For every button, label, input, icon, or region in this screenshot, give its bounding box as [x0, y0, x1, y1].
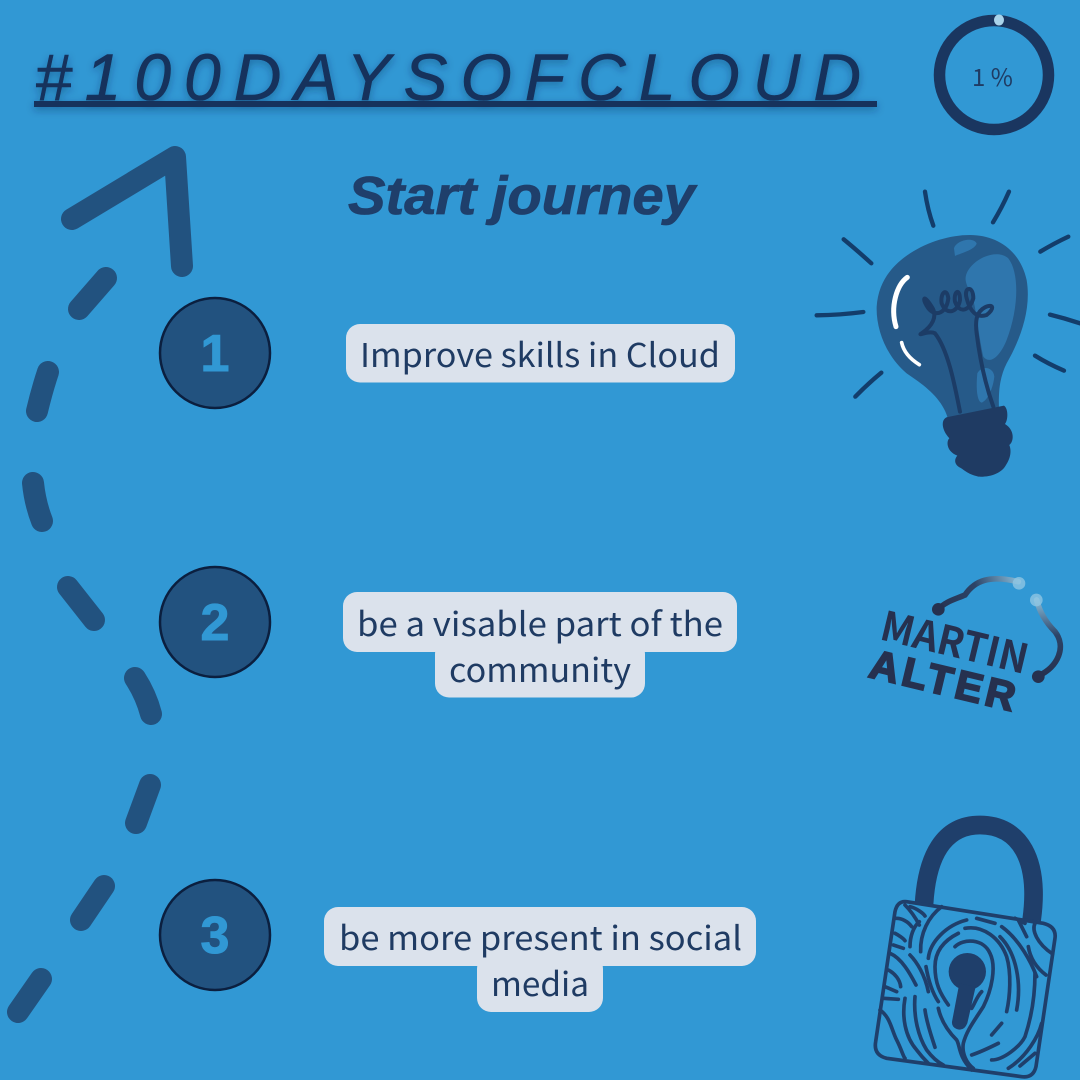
step 3 badge — [160, 880, 270, 990]
step 1 label: Improve skills in Cloud — [360, 329, 720, 377]
step 1 badge — [160, 298, 270, 408]
title: #100DAYSOFCLOUD — [35, 40, 861, 114]
step 1 badge: 1 — [201, 325, 229, 383]
logo: Martin Alter cloud: MARTIN — [876, 593, 1035, 686]
icon: fingerprint padlock — [875, 825, 1055, 1077]
step 2 badge: 2 — [201, 594, 229, 652]
progress ring 1%: 1 % — [972, 58, 1013, 93]
step 3 label: media — [491, 958, 589, 1006]
icon: light bulb — [817, 192, 1080, 477]
heading: start journey: Start journey — [348, 166, 698, 226]
step 2 label: community — [449, 644, 631, 692]
logo: Martin Alter cloud — [865, 577, 1060, 720]
dashed journey arrow — [18, 157, 182, 1012]
progress ring 1% — [940, 14, 1048, 130]
logo: Martin Alter cloud: ALTER — [865, 641, 1020, 720]
step 2 label: be a visable part of the — [357, 598, 723, 646]
step 2 badge — [160, 567, 270, 677]
step 3 badge: 3 — [201, 907, 229, 965]
step 3 label: be more present in social — [339, 912, 742, 960]
step 3 label — [324, 907, 756, 1012]
step 2 label — [343, 592, 737, 698]
